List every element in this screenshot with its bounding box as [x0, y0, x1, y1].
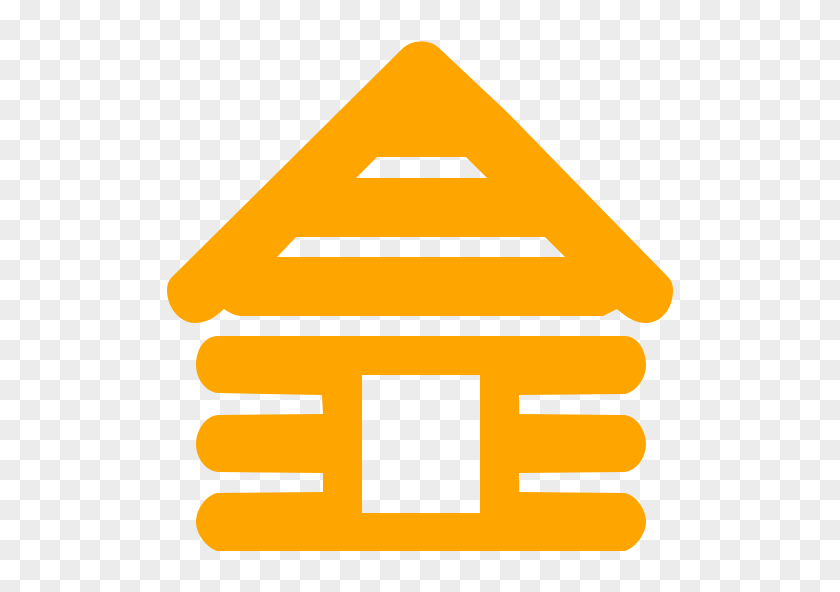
cabin walls with logs and door opening: [196, 336, 646, 551]
icon: log cabin: [167, 41, 673, 551]
roof with two window slots: [167, 41, 673, 323]
